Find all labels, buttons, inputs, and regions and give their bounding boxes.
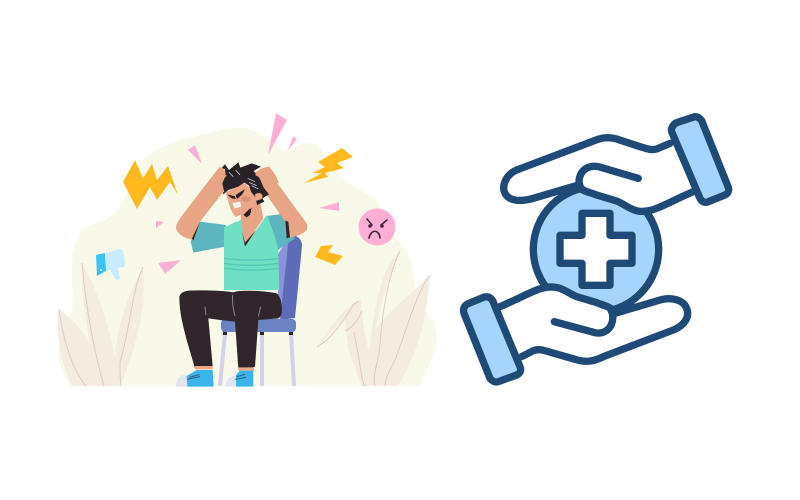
panel: stressed person illustration [58, 113, 437, 387]
face [226, 182, 260, 217]
hair [220, 162, 269, 205]
lightning bolt lower right [315, 245, 343, 265]
neck [241, 193, 263, 245]
left arm [176, 168, 227, 240]
teeth [232, 202, 241, 208]
upper body [176, 167, 307, 290]
hands [214, 167, 226, 192]
legs [176, 290, 282, 387]
medical cross [560, 213, 632, 285]
lower cuff [463, 297, 521, 382]
thumbs down icon [96, 249, 125, 280]
lower thumb line [554, 308, 613, 333]
brows and eyes [227, 189, 245, 199]
pink triangles [156, 113, 339, 274]
ear [255, 193, 262, 201]
upper thumb line [579, 166, 638, 189]
shirt [224, 215, 279, 290]
lower hand [500, 287, 688, 361]
chair [218, 236, 302, 386]
shoes [195, 366, 254, 371]
right plant [317, 251, 430, 386]
sleeves [191, 222, 226, 253]
lightning bolt top right [304, 148, 353, 183]
background blob [58, 128, 437, 386]
head [214, 162, 279, 217]
light blue circle [533, 187, 659, 312]
angry emoji [358, 208, 396, 246]
left plant [58, 263, 144, 386]
blush [241, 196, 250, 202]
lightning bolt left [123, 160, 178, 209]
panel: hands holding medical cross icon [463, 117, 729, 382]
right arm [253, 167, 307, 238]
upper hand [504, 138, 693, 211]
person [176, 162, 307, 387]
upper cuff [671, 117, 729, 202]
